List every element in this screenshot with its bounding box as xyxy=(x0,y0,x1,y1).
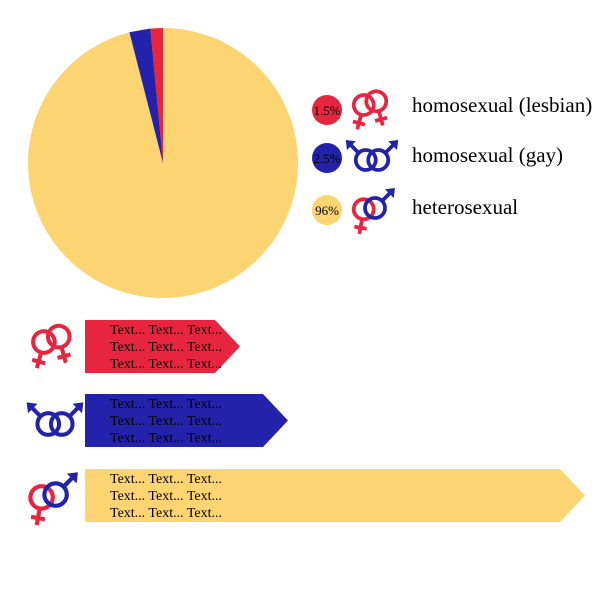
bar: hetero: Text... Text... Text... xyxy=(110,472,222,487)
legend: lesbian xyxy=(312,89,592,132)
bar: gay: Text... Text... Text... xyxy=(110,414,222,429)
bar: hetero: Text... Text... Text... xyxy=(110,489,222,504)
icon: gay xyxy=(27,402,83,435)
legend: hetero: 96% xyxy=(315,203,339,218)
bar: lesbian xyxy=(85,320,240,373)
bar: gay: Text... Text... Text... xyxy=(110,397,222,412)
bar: lesbian: Text... Text... Text... xyxy=(110,357,222,372)
bar: hetero xyxy=(85,469,585,522)
bar: gay xyxy=(85,394,288,447)
legend: gay xyxy=(312,140,563,173)
bar: lesbian: Text... Text... Text... xyxy=(110,340,222,355)
pie chart xyxy=(28,28,298,298)
icon: lesbian xyxy=(26,323,76,371)
legend: hetero xyxy=(312,188,518,236)
legend: gay: homosexual (gay) xyxy=(412,143,563,167)
legend: hetero: heterosexual xyxy=(412,195,518,219)
bar: lesbian: Text... Text... Text... xyxy=(110,323,222,338)
bar: hetero: Text... Text... Text... xyxy=(110,506,222,521)
legend: lesbian: homosexual (lesbian) xyxy=(412,93,592,117)
bar: gay: Text... Text... Text... xyxy=(110,431,222,446)
legend: gay: 2.5% xyxy=(313,151,341,166)
legend: lesbian: 1.5% xyxy=(313,103,341,118)
icon: hetero xyxy=(26,472,78,527)
